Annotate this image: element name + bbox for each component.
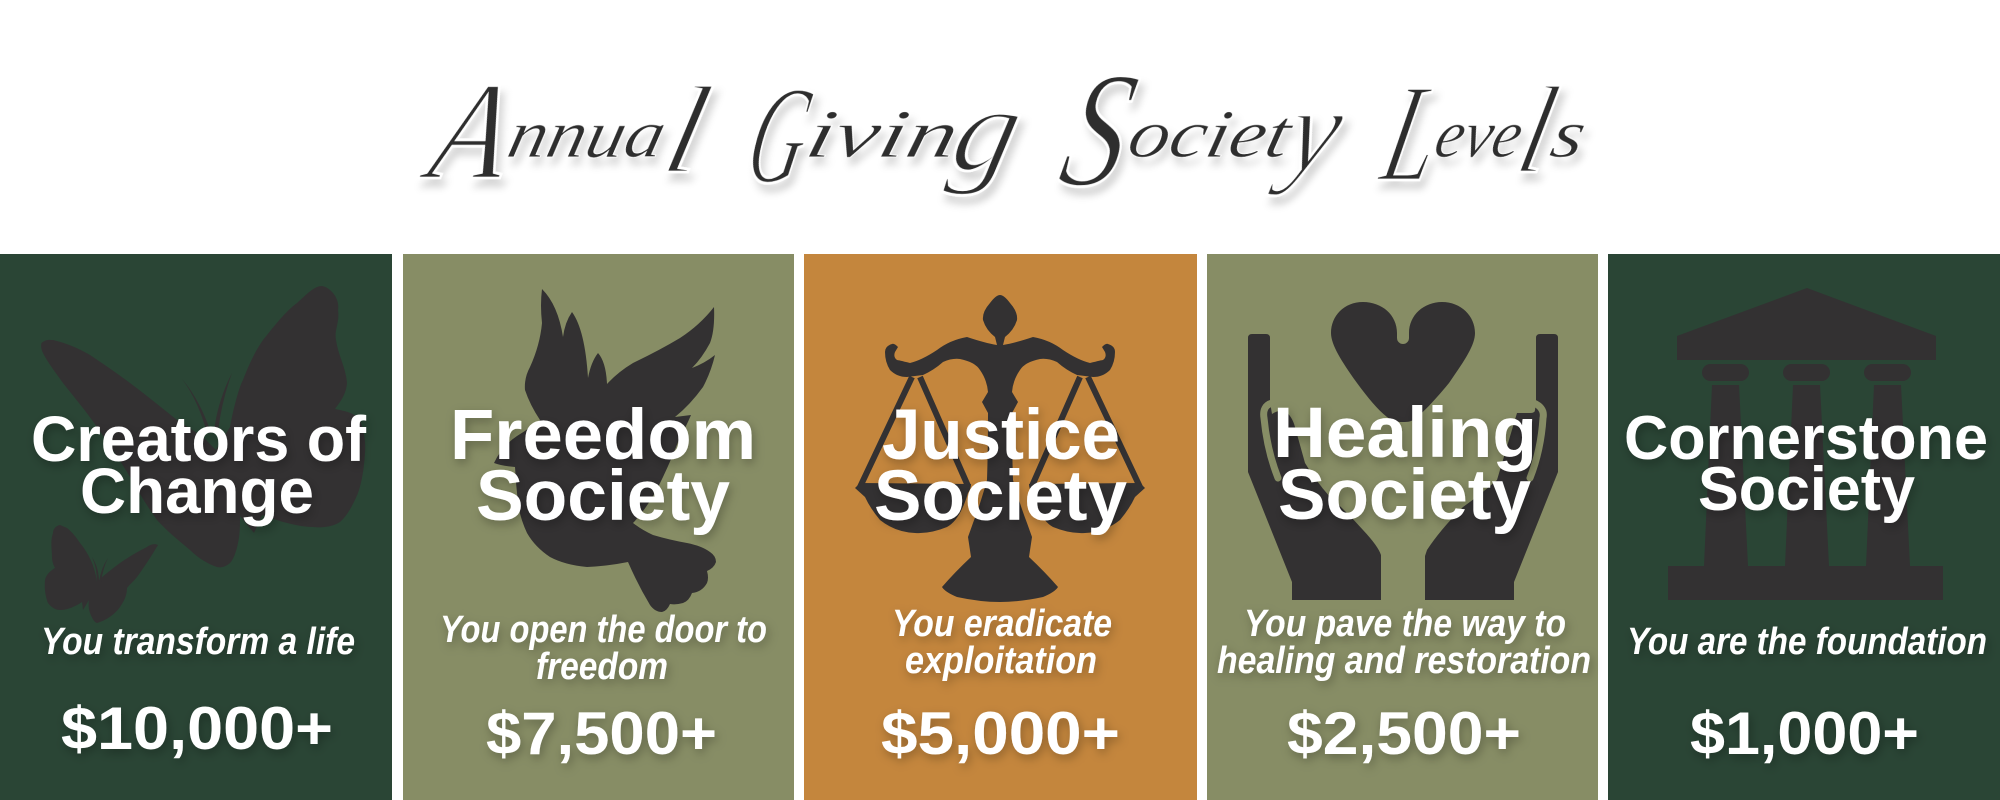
title: nnua xyxy=(501,97,674,172)
title: ociet xyxy=(1121,97,1301,172)
description xyxy=(892,603,1112,682)
title: y xyxy=(1265,64,1357,197)
description: You open the door to xyxy=(440,609,767,651)
panel: Justice Society xyxy=(804,254,1197,800)
title: ivin xyxy=(799,97,967,172)
panel: Creators of Change xyxy=(0,254,392,800)
heading xyxy=(874,396,1128,536)
heading: Justice xyxy=(882,396,1120,475)
description: freedom xyxy=(536,646,668,688)
heading: Healing xyxy=(1273,394,1537,473)
title xyxy=(408,39,1607,222)
heading: Society xyxy=(476,457,731,536)
icon: temple columns xyxy=(1668,288,1943,600)
description xyxy=(440,609,767,688)
icon: dove xyxy=(494,289,716,612)
title: A xyxy=(411,54,530,209)
amount: $10,000+ xyxy=(61,695,333,762)
title: l xyxy=(1507,61,1569,200)
panel: Cornerstone Society xyxy=(1608,254,2000,800)
title: g xyxy=(941,64,1035,197)
description: healing and restoration xyxy=(1217,640,1591,682)
heading xyxy=(31,403,367,527)
heading xyxy=(450,396,756,536)
amount: $1,000+ xyxy=(1690,700,1919,767)
heading xyxy=(1273,394,1537,535)
title: s xyxy=(1544,97,1594,172)
heading: Creators of xyxy=(31,403,367,475)
amount: $7,500+ xyxy=(486,700,717,767)
icon: butterflies xyxy=(41,286,365,623)
title: S xyxy=(1047,39,1151,222)
amount: $5,000+ xyxy=(881,700,1120,767)
icon: scales of justice xyxy=(855,295,1145,602)
left pan and strings xyxy=(855,377,971,533)
title: l xyxy=(653,61,722,200)
right pan and strings xyxy=(1029,377,1145,533)
heading: Freedom xyxy=(450,396,756,475)
heading: Change xyxy=(80,455,314,527)
heading xyxy=(1624,404,1988,524)
panel: Freedom Society xyxy=(403,254,794,800)
heading: Society xyxy=(1698,455,1916,524)
title: G xyxy=(735,58,826,213)
amount: $2,500+ xyxy=(1287,700,1521,767)
description: exploitation xyxy=(905,640,1097,682)
title: L xyxy=(1369,56,1456,211)
description: You transform a life xyxy=(41,621,355,663)
heading: Cornerstone xyxy=(1624,404,1988,473)
heading: Society xyxy=(1278,456,1532,535)
description: You eradicate xyxy=(892,603,1112,645)
description: You pave the way to xyxy=(1244,603,1566,645)
panel: Healing Society xyxy=(1207,254,1598,800)
icon: hands holding heart xyxy=(1248,302,1558,600)
heading: Society xyxy=(874,457,1128,536)
description xyxy=(1217,603,1591,682)
title: eve xyxy=(1428,97,1531,172)
